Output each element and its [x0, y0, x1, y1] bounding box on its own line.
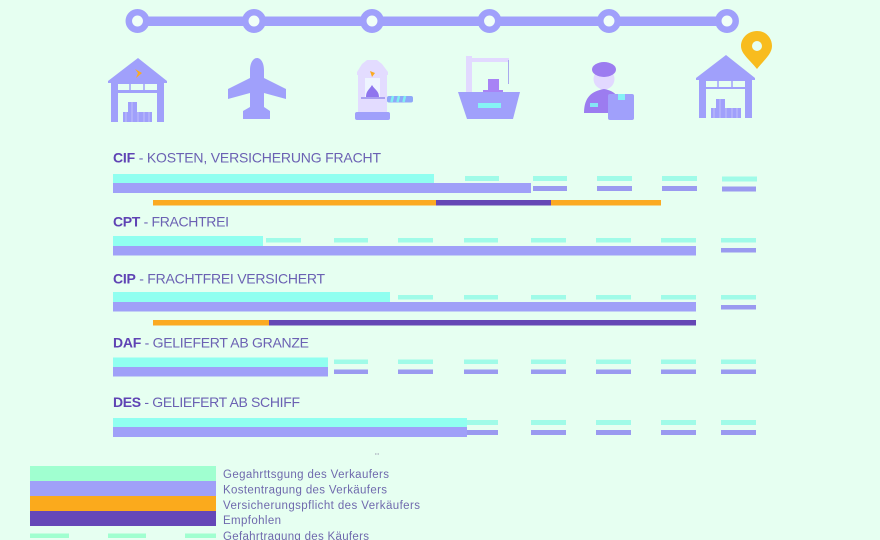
icon: cargo ship — [458, 56, 520, 119]
legend item: recommended: Empfohlen — [223, 515, 281, 527]
legend item: buyer risk — [30, 531, 369, 540]
legend item: recommended — [30, 511, 281, 527]
panel: CIF — [113, 150, 757, 206]
icon: destination warehouse — [696, 55, 755, 118]
small marks above legend — [375, 454, 379, 455]
icon: origin warehouse — [108, 58, 167, 122]
legend item: seller insurance — [30, 496, 420, 512]
risk and cost bars: DAF — [113, 358, 756, 376]
heading: CIF: CIF - KOSTEN, VERSICHERUNG FRACHT — [113, 150, 381, 166]
legend item: seller risk: Gegahrttsgung des Verkaufers — [223, 469, 389, 481]
icon: delivery person — [584, 62, 634, 120]
risk and cost bars: CIP — [113, 292, 756, 312]
insurance bar: CIP — [153, 320, 696, 326]
heading: DAF: DAF - GELIEFERT AB GRANZE — [113, 334, 309, 350]
panel: CPT — [113, 214, 756, 256]
legend — [30, 466, 420, 540]
heading: CPT: CPT - FRACHTREI — [113, 214, 229, 230]
legend item: seller cost — [30, 481, 387, 496]
panel: CIP — [113, 270, 756, 326]
heading: CIP: CIP - FRACHTFREI VERSICHERT — [113, 270, 325, 286]
heading: DES: DES - GELIEFERT AB SCHIFF — [113, 394, 300, 410]
route timeline — [129, 12, 736, 30]
icon: location pin — [741, 31, 772, 69]
legend item: seller risk — [30, 466, 389, 481]
risk and cost bars: DES — [113, 418, 756, 437]
panel: DAF — [113, 334, 756, 376]
insurance bar: CIF — [153, 200, 661, 206]
legend item: seller cost: Kostentragung des Verkäufers — [223, 484, 387, 496]
legend item: seller insurance: Versicherungspflicht des Verkäufers — [223, 500, 420, 512]
risk and cost bars: CPT — [113, 236, 756, 256]
icon: customs booth — [355, 60, 413, 120]
icon: airplane — [228, 58, 286, 119]
panel: DES — [113, 394, 756, 437]
risk and cost bars: CIF — [113, 174, 757, 193]
